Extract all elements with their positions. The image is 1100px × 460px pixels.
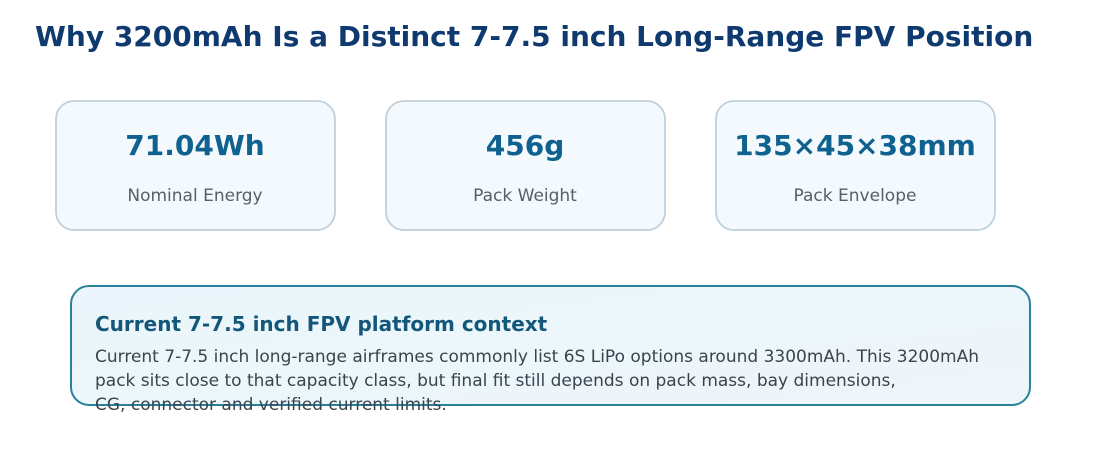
panel: nominal energy bbox=[56, 101, 335, 230]
context body text: pack sits close to that capacity class, but final fit still depends on pack mass, bay dimensions, bbox=[95, 371, 896, 391]
context body text: Current 7-7.5 inch long-range airframes commonly list 6S LiPo options around 3300mAh. This 3200mAh bbox=[95, 347, 979, 367]
value: envelope: 135×45×38mm bbox=[734, 129, 976, 162]
title: Why 3200mAh Is a Distinct 7-7.5 inch Long-Range FPV Position bbox=[35, 20, 1033, 53]
panel: pack envelope bbox=[716, 101, 995, 230]
context body text bbox=[95, 347, 979, 415]
label: envelope: Pack Envelope bbox=[794, 186, 916, 206]
context heading: Current 7-7.5 inch FPV platform context bbox=[95, 312, 548, 336]
context body text: CG, connector and verified current limits. bbox=[95, 395, 447, 415]
label: weight: Pack Weight bbox=[473, 186, 577, 206]
panel: pack weight bbox=[386, 101, 665, 230]
label: energy: Nominal Energy bbox=[127, 186, 263, 206]
panel: platform context bbox=[71, 286, 1030, 415]
value: energy: 71.04Wh bbox=[125, 129, 265, 162]
value: weight: 456g bbox=[486, 129, 564, 162]
